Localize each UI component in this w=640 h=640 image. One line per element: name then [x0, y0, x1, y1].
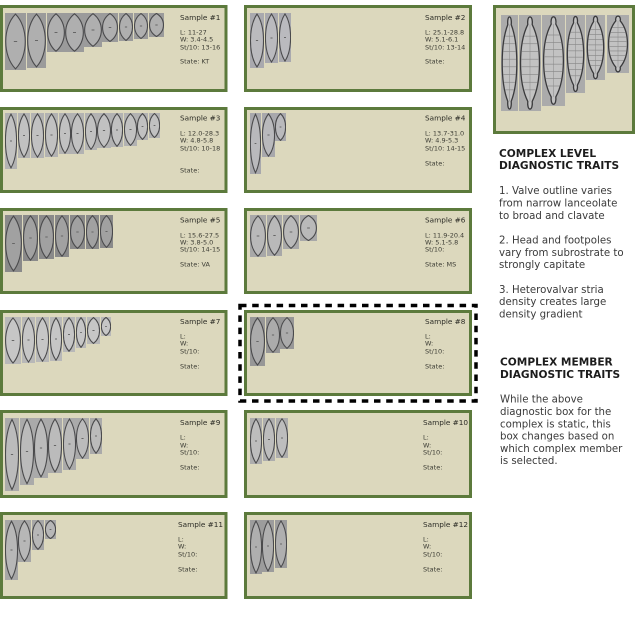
sample 4 measurements: St/10: 14-15: [425, 144, 465, 152]
sample 11 measurements: L:: [178, 536, 184, 544]
sample 10 measurements: State:: [423, 464, 442, 472]
sample 1 measurements: State: KT: [180, 58, 209, 66]
heading: complex level diagnostic traits: COMPLEX LEVEL: [499, 148, 596, 160]
panel: sample 1: [2, 6, 226, 90]
sample 8 measurements: L:: [425, 332, 431, 340]
text: complex member description: is selected.: [500, 456, 558, 467]
sample 2 measurements: State:: [425, 58, 444, 66]
sample 9 title: Sample #9: [180, 418, 221, 427]
sample 8 measurements: W:: [425, 340, 433, 348]
sample 2 measurements: W: 5.1-6.1: [425, 36, 458, 44]
panel: sample 4: [246, 108, 470, 192]
sample 9 measurements: W:: [180, 442, 188, 450]
panel: sample 12: [246, 514, 470, 598]
text: complex level trait 2: strongly capitate: [499, 260, 585, 271]
sample 8 title: Sample #8: [425, 317, 466, 326]
sample 8 measurements: State:: [425, 362, 444, 370]
sample 2 title: Sample #2: [425, 13, 465, 22]
heading: complex member diagnostic traits: DIAGNOSTIC TRAITS: [500, 369, 620, 381]
specimen images: sample 5: [5, 215, 113, 272]
sample 10 title: Sample #10: [423, 418, 468, 427]
sample 1 measurements: St/10: 13-16: [180, 44, 220, 52]
sample 7 measurements: L:: [180, 332, 186, 340]
specimen images: sample 6: [250, 215, 317, 257]
specimen images: sample 8: [250, 317, 294, 366]
specimen images: complex overview: [501, 15, 629, 111]
sample 5 measurements: State: VA: [180, 260, 210, 268]
sample 8 measurements: St/10:: [425, 348, 444, 356]
sample 3 measurements: St/10: 10-18: [180, 144, 220, 152]
panel: sample 3: [2, 108, 226, 192]
panel: sample 8 (selected): [246, 312, 470, 394]
sample 6 measurements: State: MS: [425, 260, 456, 268]
sample 4 title: Sample #4: [425, 114, 466, 122]
sample 6 measurements: St/10:: [425, 246, 444, 254]
text: complex level trait 1: 1. Valve outline varies: [499, 186, 612, 197]
sample 9 measurements: St/10:: [180, 448, 199, 456]
sample 10 measurements: W:: [423, 442, 431, 450]
sample 5 measurements: W: 3.8-5.0: [180, 238, 213, 246]
sample 11 measurements: W:: [178, 542, 186, 550]
sample 7 measurements: State:: [180, 362, 199, 370]
sample 12 measurements: L:: [423, 536, 429, 544]
specimen images: sample 2: [250, 13, 291, 68]
sample 11 measurements: St/10:: [178, 550, 197, 558]
text: complex member description: While the above: [500, 394, 583, 406]
sample 12 measurements: St/10:: [423, 550, 442, 558]
sample 3 title: Sample #3: [180, 114, 221, 122]
sample 10 measurements: L:: [423, 434, 429, 442]
sample 3 measurements: W: 4.8-5.8: [180, 136, 213, 144]
heading: complex member diagnostic traits: COMPLEX MEMBER: [500, 356, 613, 368]
sample 12 measurements: W:: [423, 542, 431, 550]
sample 9 measurements: State:: [180, 464, 199, 472]
sample 3 measurements: L: 12.0-28.3: [180, 130, 219, 138]
text: complex level trait 3: 3. Heterovalvar stria: [499, 285, 604, 296]
sample 5 title: Sample #5: [180, 216, 220, 224]
panel: sample 2: [246, 6, 470, 90]
sample 5 measurements: L: 15.6-27.5: [180, 232, 219, 240]
panel: complex overview specimens: [494, 6, 634, 132]
heading: complex level diagnostic traits: DIAGNOSTIC TRAITS: [499, 160, 619, 172]
sample 11 title: Sample #11: [178, 520, 223, 529]
text: complex level trait 2: 2. Head and footpoles: [499, 236, 611, 246]
text: complex member description: complex is static, this: [500, 420, 611, 430]
panel: sample 7: [2, 312, 226, 394]
text: complex level trait 1: from narrow lanceolate: [499, 198, 617, 210]
text: complex member description: box changes based on: [500, 432, 614, 442]
panel: sample 6: [246, 210, 470, 292]
sample 6 measurements: L: 11.9-20.4: [425, 232, 464, 240]
text: complex member description: which complex member: [500, 444, 623, 455]
sample 10 measurements: St/10:: [423, 448, 442, 456]
panel: sample 11: [2, 514, 226, 598]
text: complex member description: diagnostic box for the: [500, 407, 611, 418]
panel: sample 10: [246, 412, 470, 496]
sample 4 measurements: L: 13.7-31.0: [425, 130, 464, 138]
specimen images: sample 1: [5, 13, 164, 70]
sample 2 measurements: St/10: 13-14: [425, 44, 465, 52]
sample 7 measurements: W:: [180, 340, 188, 348]
text: complex level trait 3: density creates large: [499, 297, 606, 308]
sample 9 measurements: L:: [180, 434, 186, 442]
sample 2 measurements: L: 25.1-28.8: [425, 28, 464, 36]
sample 6 measurements: W: 5.1-5.8: [425, 238, 458, 246]
specimen images: sample 4: [250, 113, 286, 174]
sample 12 measurements: State:: [423, 566, 442, 574]
text: complex level trait 1: to broad and clavate: [499, 211, 605, 222]
sample 4 measurements: State:: [425, 160, 444, 168]
specimen images: sample 12: [250, 520, 287, 574]
panel: sample 5: [2, 210, 226, 292]
text: complex level trait 2: vary from subrostrate to: [499, 248, 624, 259]
sample 11 measurements: State:: [178, 566, 197, 574]
sample 1 measurements: L: 11-27: [180, 28, 207, 36]
sample 5 measurements: St/10: 14-15: [180, 246, 220, 254]
sample 4 measurements: W: 4.9-5.3: [425, 136, 458, 144]
sample 7 title: Sample #7: [180, 317, 221, 326]
specimen images: sample 11: [5, 520, 56, 580]
sample 1 title: Sample #1: [180, 13, 220, 22]
text: complex level trait 3: density gradient: [499, 310, 583, 320]
sample 1 measurements: W: 3.4-4.5: [180, 36, 213, 44]
panel: sample 9: [2, 412, 226, 496]
sample 6 title: Sample #6: [425, 216, 466, 224]
specimen images: sample 7: [5, 317, 111, 364]
sample 7 measurements: St/10:: [180, 348, 199, 356]
specimen images: sample 10: [250, 418, 288, 464]
sample 3 measurements: State:: [180, 166, 199, 174]
specimen images: sample 9: [5, 418, 102, 491]
selection highlight: dashed box around sample 8: [240, 306, 476, 401]
specimen images: sample 3: [5, 113, 160, 169]
sample 12 title: Sample #12: [423, 520, 468, 529]
